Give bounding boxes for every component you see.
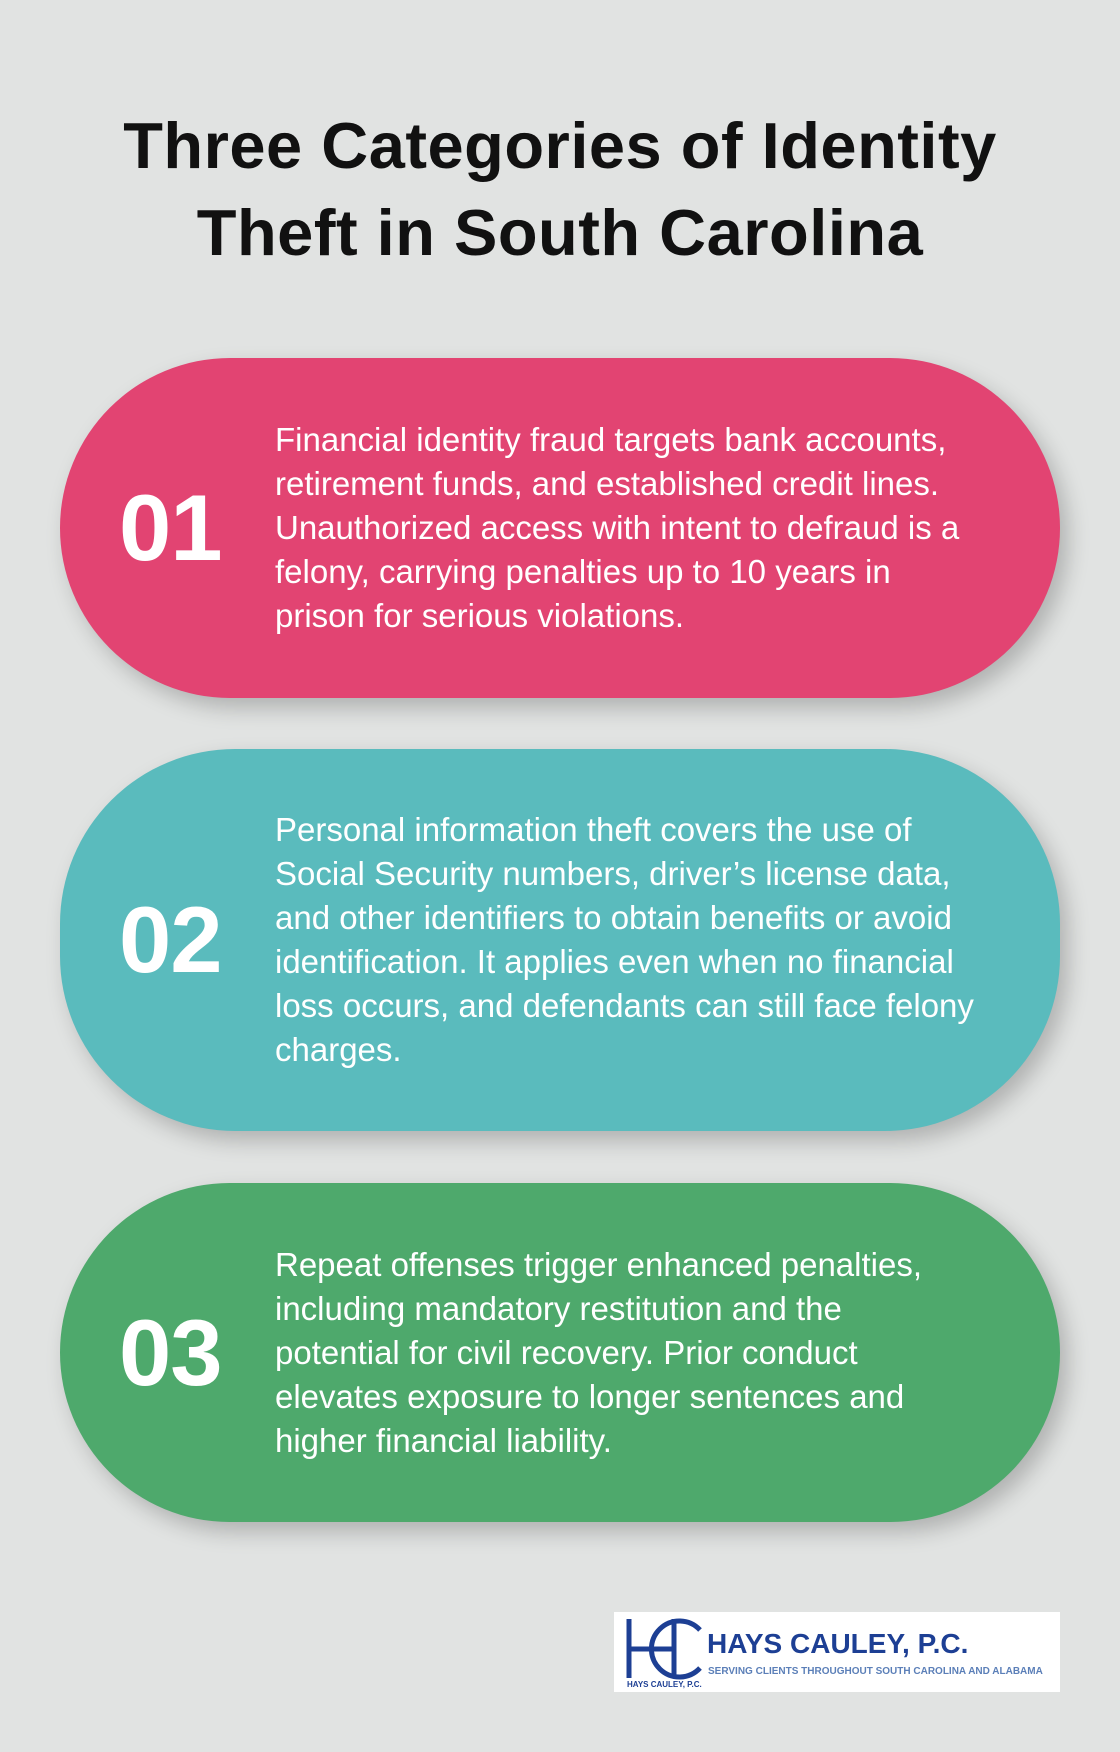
number 02: 02 [119, 887, 222, 992]
text 03: higher financial liability. [275, 1422, 612, 1458]
text 02: loss occurs, and defendants can still face felony [275, 987, 974, 1024]
title: Theft in South Carolina [197, 196, 923, 269]
text 02: and other identifiers to obtain benefits or avoid [275, 899, 952, 936]
logo [614, 1612, 1060, 1692]
logo tagline: SERVING CLIENTS THROUGHOUT SOUTH CAROLINA AND ALABAMA [708, 1666, 1043, 1677]
logo name: HAYS CAULEY, P.C. [707, 1628, 968, 1659]
text 02: identification. It applies even when no financial [275, 943, 954, 980]
text 01: felony, carrying penalties up to 10 years in [275, 553, 891, 590]
text 02: charges. [275, 1031, 402, 1068]
text 02 [275, 811, 974, 1068]
logo: HAYS CAULEY, P.C. [627, 1680, 702, 1689]
text 02: Personal information theft covers the use of [275, 811, 912, 848]
title [123, 109, 997, 269]
text 01: Unauthorized access with intent to defraud is a [275, 509, 959, 546]
panel: 01 financial [60, 358, 1060, 698]
text 03: potential for civil recovery. Prior conduct [275, 1334, 858, 1370]
text 01: retirement funds, and established credit lines. [275, 465, 939, 502]
text 01: prison for serious violations. [275, 597, 684, 634]
icon: HC monogram [626, 1618, 702, 1680]
number 01: 01 [119, 475, 222, 580]
text 03: elevates exposure to longer sentences and [275, 1378, 904, 1414]
text 03 [275, 1246, 922, 1459]
text 01 [275, 421, 960, 634]
text 03: including mandatory restitution and the [275, 1290, 842, 1326]
text 02: Social Security numbers, driver’s license data, [275, 855, 951, 892]
panel: 02 personal [60, 749, 1060, 1131]
text 03: Repeat offenses trigger enhanced penalties, [275, 1246, 922, 1282]
text 01: Financial identity fraud targets bank accounts, [275, 421, 946, 458]
title: Three Categories of Identity [123, 109, 997, 182]
panel: 03 repeat [60, 1183, 1060, 1522]
number 03: 03 [119, 1300, 222, 1404]
